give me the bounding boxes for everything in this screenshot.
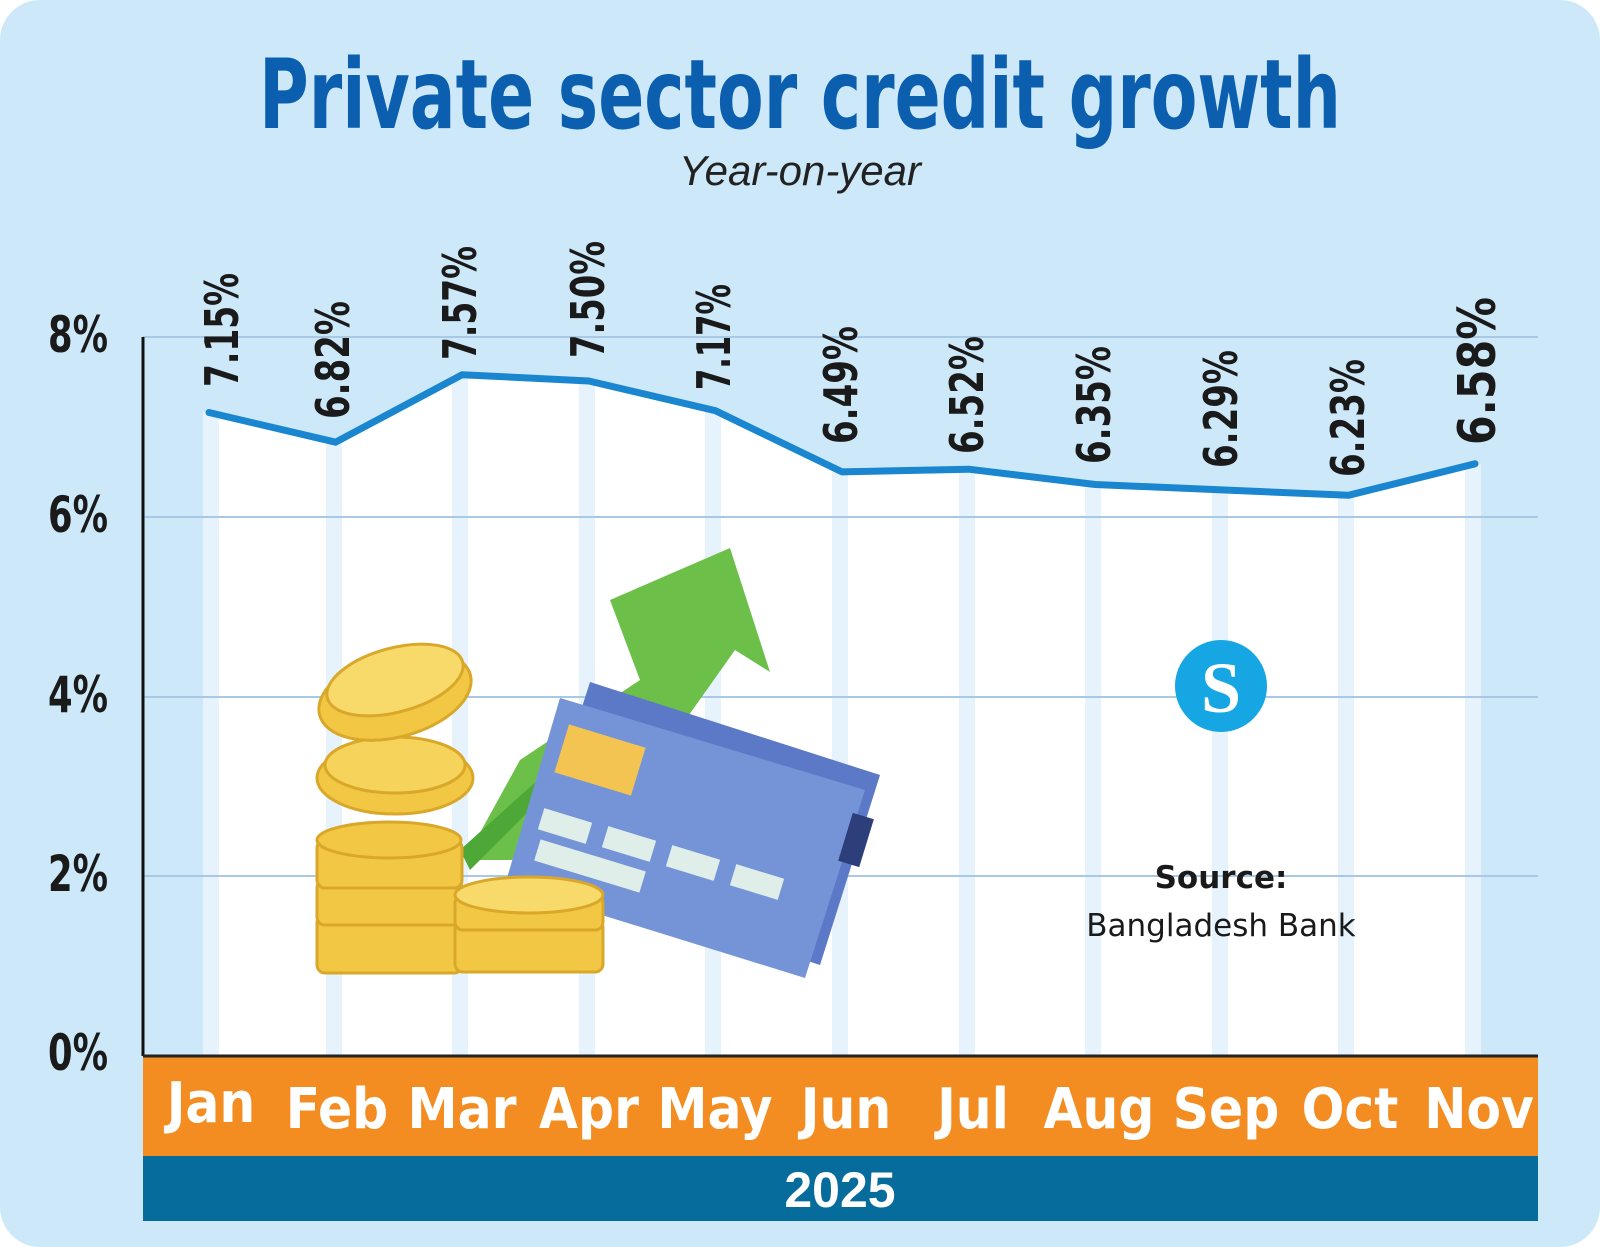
month band: Nov — [1424, 1077, 1534, 1142]
coins stack left — [309, 631, 603, 973]
value labels: 6.52% — [940, 336, 994, 454]
value labels: 7.50% — [561, 241, 615, 358]
y labels: 8% — [48, 306, 108, 364]
year band: 2025 — [784, 1162, 896, 1218]
value labels: 6.23% — [1321, 359, 1375, 477]
chart — [48, 241, 1538, 1082]
month band: May — [657, 1077, 773, 1142]
month band: Oct — [1302, 1077, 1398, 1142]
arrow — [465, 548, 770, 860]
source: Bangladesh Bank — [1086, 908, 1356, 944]
value labels: 7.15% — [195, 273, 249, 387]
y labels: 0% — [48, 1024, 108, 1082]
subtitle: Year-on-year — [679, 147, 923, 194]
month band: Feb — [286, 1077, 388, 1142]
y labels: 2% — [48, 845, 108, 903]
y labels — [48, 306, 108, 1082]
line — [209, 375, 1475, 495]
value labels: 6.35% — [1067, 346, 1121, 464]
y labels: 6% — [48, 486, 108, 544]
month band: Mar — [408, 1077, 517, 1142]
source: Source: — [1155, 860, 1287, 896]
month band — [143, 1055, 1538, 1156]
month band: Sep — [1173, 1077, 1279, 1142]
value labels: 7.17% — [687, 284, 741, 390]
card back — [530, 682, 880, 965]
value labels: 7.57% — [433, 246, 487, 360]
month band: Jan — [164, 1071, 255, 1136]
value labels: 6.29% — [1194, 350, 1248, 468]
illustration: coins, card and arrow — [309, 548, 880, 978]
title: Private sector credit growth — [259, 39, 1341, 151]
month band: Jun — [798, 1077, 891, 1142]
month band: Aug — [1044, 1077, 1154, 1142]
value labels: 6.58% — [1448, 297, 1508, 445]
logo: S — [1201, 648, 1241, 728]
year band — [143, 1156, 1538, 1221]
value labels: 6.82% — [306, 301, 360, 419]
month band: Jul — [934, 1077, 1009, 1142]
source — [1086, 860, 1356, 944]
y axis — [142, 337, 144, 1056]
y labels: 4% — [48, 666, 108, 724]
logo — [1175, 640, 1267, 732]
card front — [505, 698, 865, 978]
value labels — [195, 241, 1508, 477]
value labels: 6.49% — [814, 326, 868, 444]
white area under line — [209, 375, 1475, 1056]
month band: Apr — [539, 1077, 639, 1142]
